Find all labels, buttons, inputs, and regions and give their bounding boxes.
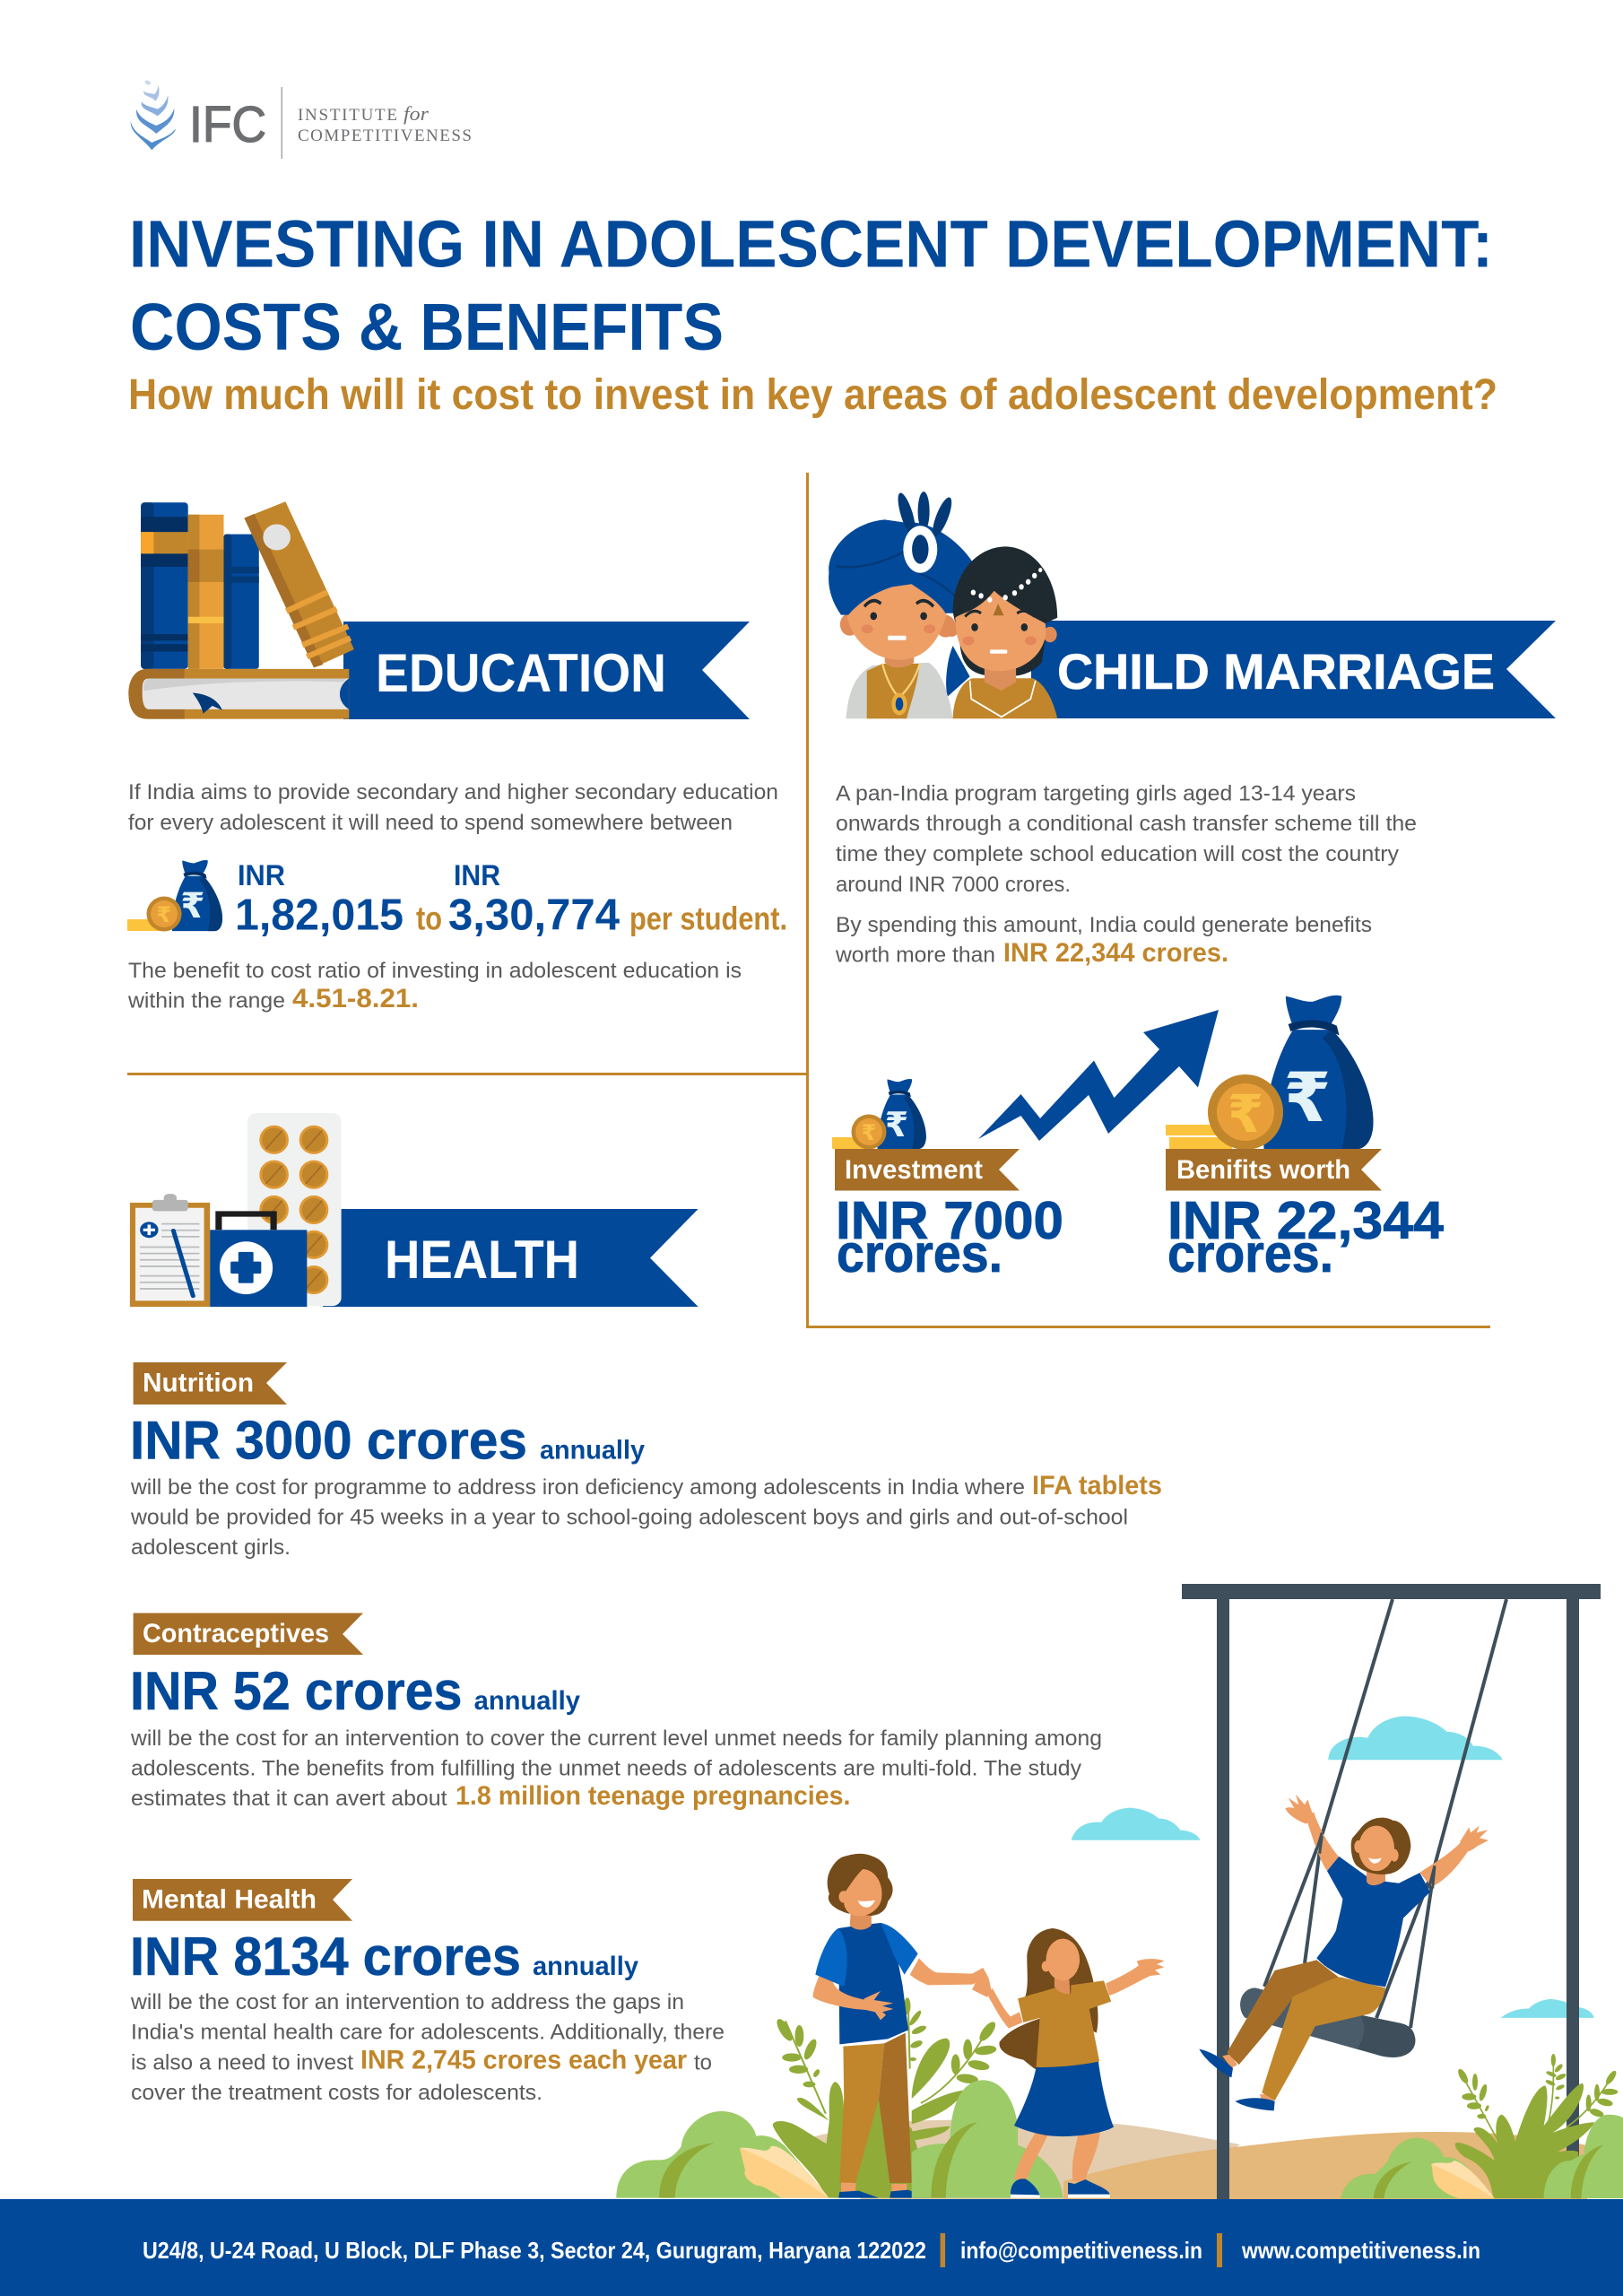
- text block: mental health: is also a need to invest: [131, 2050, 353, 2074]
- label: investment: [835, 1149, 1020, 1191]
- footer: U24/8, U-24 Road, U Block, DLF Phase 3, Sector 24, Gurugram, Haryana 122022: [143, 2237, 926, 2264]
- text block: benefit to cost ratio: within the range: [127, 989, 285, 1013]
- arrow: rising trend: [978, 1010, 1219, 1141]
- logo: IFC Institute for Competitiveness: for: [404, 102, 429, 125]
- text block: contraceptives: estimates that it can avert about: [131, 1787, 447, 1811]
- subtitle: How much will it cost to invest in key areas of adolescent development?: [128, 371, 1497, 419]
- text block: contraceptives: [130, 1726, 1102, 1811]
- person: younger girl: [972, 1928, 1164, 2198]
- text block: benefit to cost ratio: The benefit to cost ratio of investing in adolescent education is: [128, 959, 742, 983]
- text block: child marriage benefits: By spending this amount, India could generate benefits: [836, 913, 1372, 937]
- text block: nutrition: [130, 1471, 1162, 1560]
- text block: child marriage programme: onwards through a conditional cash transfer scheme till the: [836, 812, 1417, 836]
- cost range: to: [416, 900, 442, 936]
- icon: small money bag with coin: ₹: [862, 1120, 876, 1145]
- figure: contraceptives cost: annually: [474, 1686, 580, 1716]
- text block: education intro: If India aims to provide secondary and higher secondary education: [128, 780, 778, 804]
- text block: nutrition: will be the cost for programme to address iron deficiency among adolescents in India where: [130, 1475, 1025, 1500]
- person on swing: [1199, 1795, 1488, 2110]
- text block: benefit to cost ratio: 4.51-8.21.: [292, 984, 419, 1013]
- label: nutrition: Nutrition: [143, 1368, 254, 1397]
- icon: large money bag with coin: ₹: [1284, 1057, 1331, 1137]
- figure: benefits amount: [1167, 1191, 1444, 1283]
- text block: education intro: for every adolescent it will need to spend somewhere between: [128, 811, 733, 835]
- icon: child bride and groom: [829, 491, 1057, 718]
- label: nutrition: [134, 1362, 287, 1405]
- text block: mental health: [130, 1990, 725, 2105]
- hills: [811, 2119, 1587, 2199]
- text block: contraceptives: adolescents. The benefits from fulfilling the unmet needs of adolescents are multi-fold. The study: [131, 1757, 1082, 1781]
- cost range: 3,30,774: [448, 891, 620, 940]
- figure: contraceptives cost: INR 52 crores: [130, 1661, 463, 1721]
- icon: money bag and coin: ₹: [180, 886, 205, 926]
- figure: mental health cost: annually: [533, 1952, 638, 1981]
- text block: child marriage benefits: worth more than: [835, 944, 995, 967]
- text block: child marriage programme: time they complete school education will cost the country: [836, 842, 1400, 866]
- section: mental health: [130, 1879, 725, 2105]
- title: INVESTING IN ADOLESCENT DEVELOPMENT:: [129, 206, 1493, 282]
- text block: mental health: to: [694, 2050, 712, 2074]
- icon: large money bag with coin: [1166, 996, 1373, 1150]
- cost range: per student.: [629, 900, 787, 936]
- label: investment: Investment: [845, 1155, 983, 1185]
- text block: nutrition: IFA tablets: [1032, 1471, 1162, 1500]
- cost range: 1,82,015: [235, 891, 404, 940]
- label: benefits worth: [1166, 1149, 1382, 1191]
- figure: investment amount: INR 7000: [836, 1191, 1063, 1250]
- section: nutrition: [130, 1362, 1162, 1560]
- footer: info@competitiveness.in: [960, 2237, 1202, 2264]
- text block: nutrition: would be provided for 45 weeks in a year to school-going adolescent boys and girls and out-of-school: [130, 1506, 1128, 1530]
- text block: mental health: cover the treatment costs for adolescents.: [131, 2081, 542, 2105]
- figure: investment amount: crores.: [837, 1224, 1002, 1283]
- footer: www.competitiveness.in: [1241, 2237, 1480, 2264]
- text block: nutrition: adolescent girls.: [131, 1535, 291, 1560]
- logo: IFC Institute for Competitiveness: COMPETITIVENESS: [298, 126, 472, 145]
- heading: education: EDUCATION: [376, 643, 666, 703]
- text block: child marriage benefits: [835, 913, 1372, 968]
- title: COSTS & BENEFITS: [130, 290, 724, 364]
- label: mental health: Mental Health: [142, 1885, 317, 1915]
- figure: benefits amount: crores.: [1167, 1224, 1333, 1283]
- label: benefits worth: Benifits worth: [1176, 1155, 1350, 1185]
- text block: mental health: India's mental health care for adolescents. Additionally, there: [131, 2021, 725, 2045]
- text block: contraceptives: will be the cost for an intervention to cover the current level unmet needs for family planning among: [130, 1726, 1102, 1751]
- horizontal divider: child marriage bottom: [806, 1326, 1490, 1328]
- icon: medical supplies: [130, 1113, 342, 1307]
- icon: books: [128, 501, 354, 719]
- figure: benefits amount: INR 22,344: [1167, 1191, 1444, 1250]
- icon: small money bag with coin: ₹: [885, 1105, 908, 1144]
- text block: education intro: [128, 780, 778, 835]
- label: mental health: [133, 1879, 352, 1921]
- text block: mental health: will be the cost for an intervention to address the gaps in: [130, 1990, 684, 2014]
- logo: IFC Institute for Competitiveness: INSTITUTE: [298, 106, 397, 125]
- icon: small money bag with coin: [832, 1079, 926, 1150]
- swing frame: [1182, 1584, 1601, 2199]
- horizontal divider: education bottom: [127, 1073, 808, 1075]
- figure: mental health cost: INR 8134 crores: [130, 1926, 521, 1987]
- panel: child marriage heading: [829, 491, 1556, 718]
- text block: child marriage programme: around INR 7000 crores.: [836, 873, 1071, 897]
- illustration: playground scene: [616, 1584, 1623, 2199]
- icon: large money bag with coin: ₹: [1228, 1083, 1263, 1144]
- section: contraceptives: [130, 1613, 1102, 1811]
- panel: health heading: [130, 1113, 699, 1307]
- plants: left cluster: [616, 1997, 999, 2198]
- ribbon: education: [343, 622, 750, 719]
- cost range: INR: [454, 859, 500, 891]
- heading: health: HEALTH: [385, 1230, 579, 1290]
- ribbon: child marriage: [1031, 621, 1556, 718]
- text block: mental health: INR 2,745 crores each year: [360, 2045, 687, 2075]
- footer: [0, 2199, 1623, 2296]
- heading: child marriage: CHILD MARRIAGE: [1057, 643, 1495, 700]
- vertical divider: [806, 473, 809, 1327]
- person: older child: [813, 1854, 988, 2198]
- plants: centre bush: [912, 2080, 1063, 2198]
- cost range: INR: [238, 859, 285, 891]
- label: contraceptives: Contraceptives: [143, 1619, 329, 1648]
- icon: money bag and coin: [127, 860, 222, 931]
- cost range: [235, 859, 787, 940]
- text block: child marriage benefits: INR 22,344 crores.: [1003, 938, 1228, 968]
- logo: IFC Institute for Competitiveness: IFC: [189, 96, 266, 153]
- figure: investment amount: [836, 1191, 1063, 1283]
- icon: money bag and coin: ₹: [157, 902, 171, 927]
- logo: IFC Institute for Competitiveness: [131, 81, 472, 159]
- panel: education heading: [128, 501, 750, 719]
- text block: child marriage programme: [836, 782, 1417, 897]
- text block: contraceptives: 1.8 million teenage pregnancies.: [456, 1781, 850, 1811]
- ribbon: health: [323, 1209, 699, 1307]
- figure: nutrition cost: annually: [540, 1435, 645, 1465]
- clouds: [1072, 1717, 1594, 2018]
- swing ropes: [1264, 1599, 1506, 2028]
- plants: right cluster: [1341, 2054, 1623, 2198]
- text block: benefit to cost ratio: [127, 959, 742, 1013]
- title: [129, 206, 1493, 364]
- figure: nutrition cost: INR 3000 crores: [130, 1410, 527, 1471]
- label: contraceptives: [134, 1613, 363, 1655]
- text block: child marriage programme: A pan-India program targeting girls aged 13-14 years: [836, 782, 1356, 805]
